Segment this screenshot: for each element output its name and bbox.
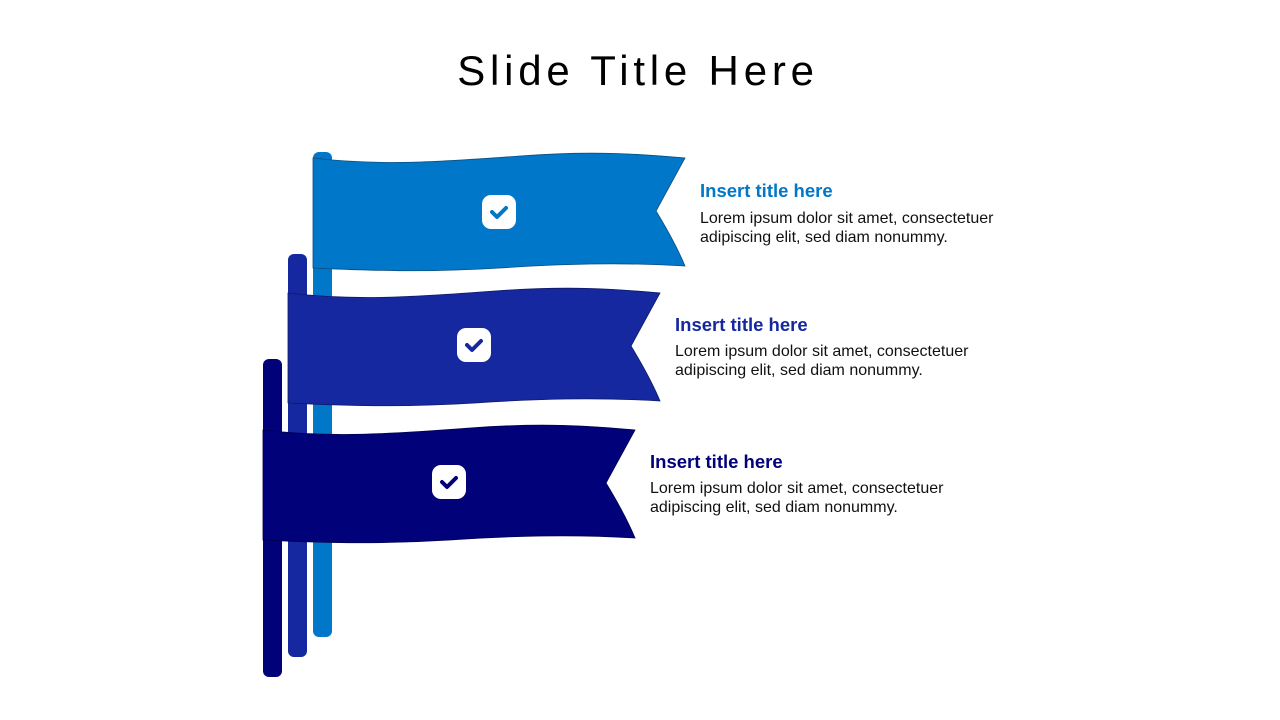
text block 3: Insert title here: [650, 451, 783, 472]
icon: check 3: [432, 465, 466, 499]
pole 1: [313, 152, 332, 637]
text block 1: Lorem ipsum dolor sit amet, consectetuer: [700, 210, 994, 227]
text block 2: [675, 314, 969, 379]
pole 3: [263, 359, 282, 677]
text block 1: adipiscing elit, sed diam nonummy.: [700, 229, 948, 246]
text block 3: [650, 451, 944, 516]
text block 1: [700, 180, 994, 246]
flag 1: [313, 153, 685, 271]
text block 3: adipiscing elit, sed diam nonummy.: [650, 499, 898, 516]
text block 2: adipiscing elit, sed diam nonummy.: [675, 362, 923, 379]
text block 1: Insert title here: [700, 180, 833, 201]
text block 2: Insert title here: [675, 314, 808, 335]
text block 2: Lorem ipsum dolor sit amet, consectetuer: [675, 343, 969, 360]
flag 2: [288, 288, 660, 406]
icon: check 1: [482, 195, 516, 229]
text block 3: Lorem ipsum dolor sit amet, consectetuer: [650, 480, 944, 497]
pole 2: [288, 254, 307, 657]
icon: check 2: [457, 328, 491, 362]
flag 3: [263, 425, 635, 543]
title: Slide Title Here: [457, 47, 819, 94]
